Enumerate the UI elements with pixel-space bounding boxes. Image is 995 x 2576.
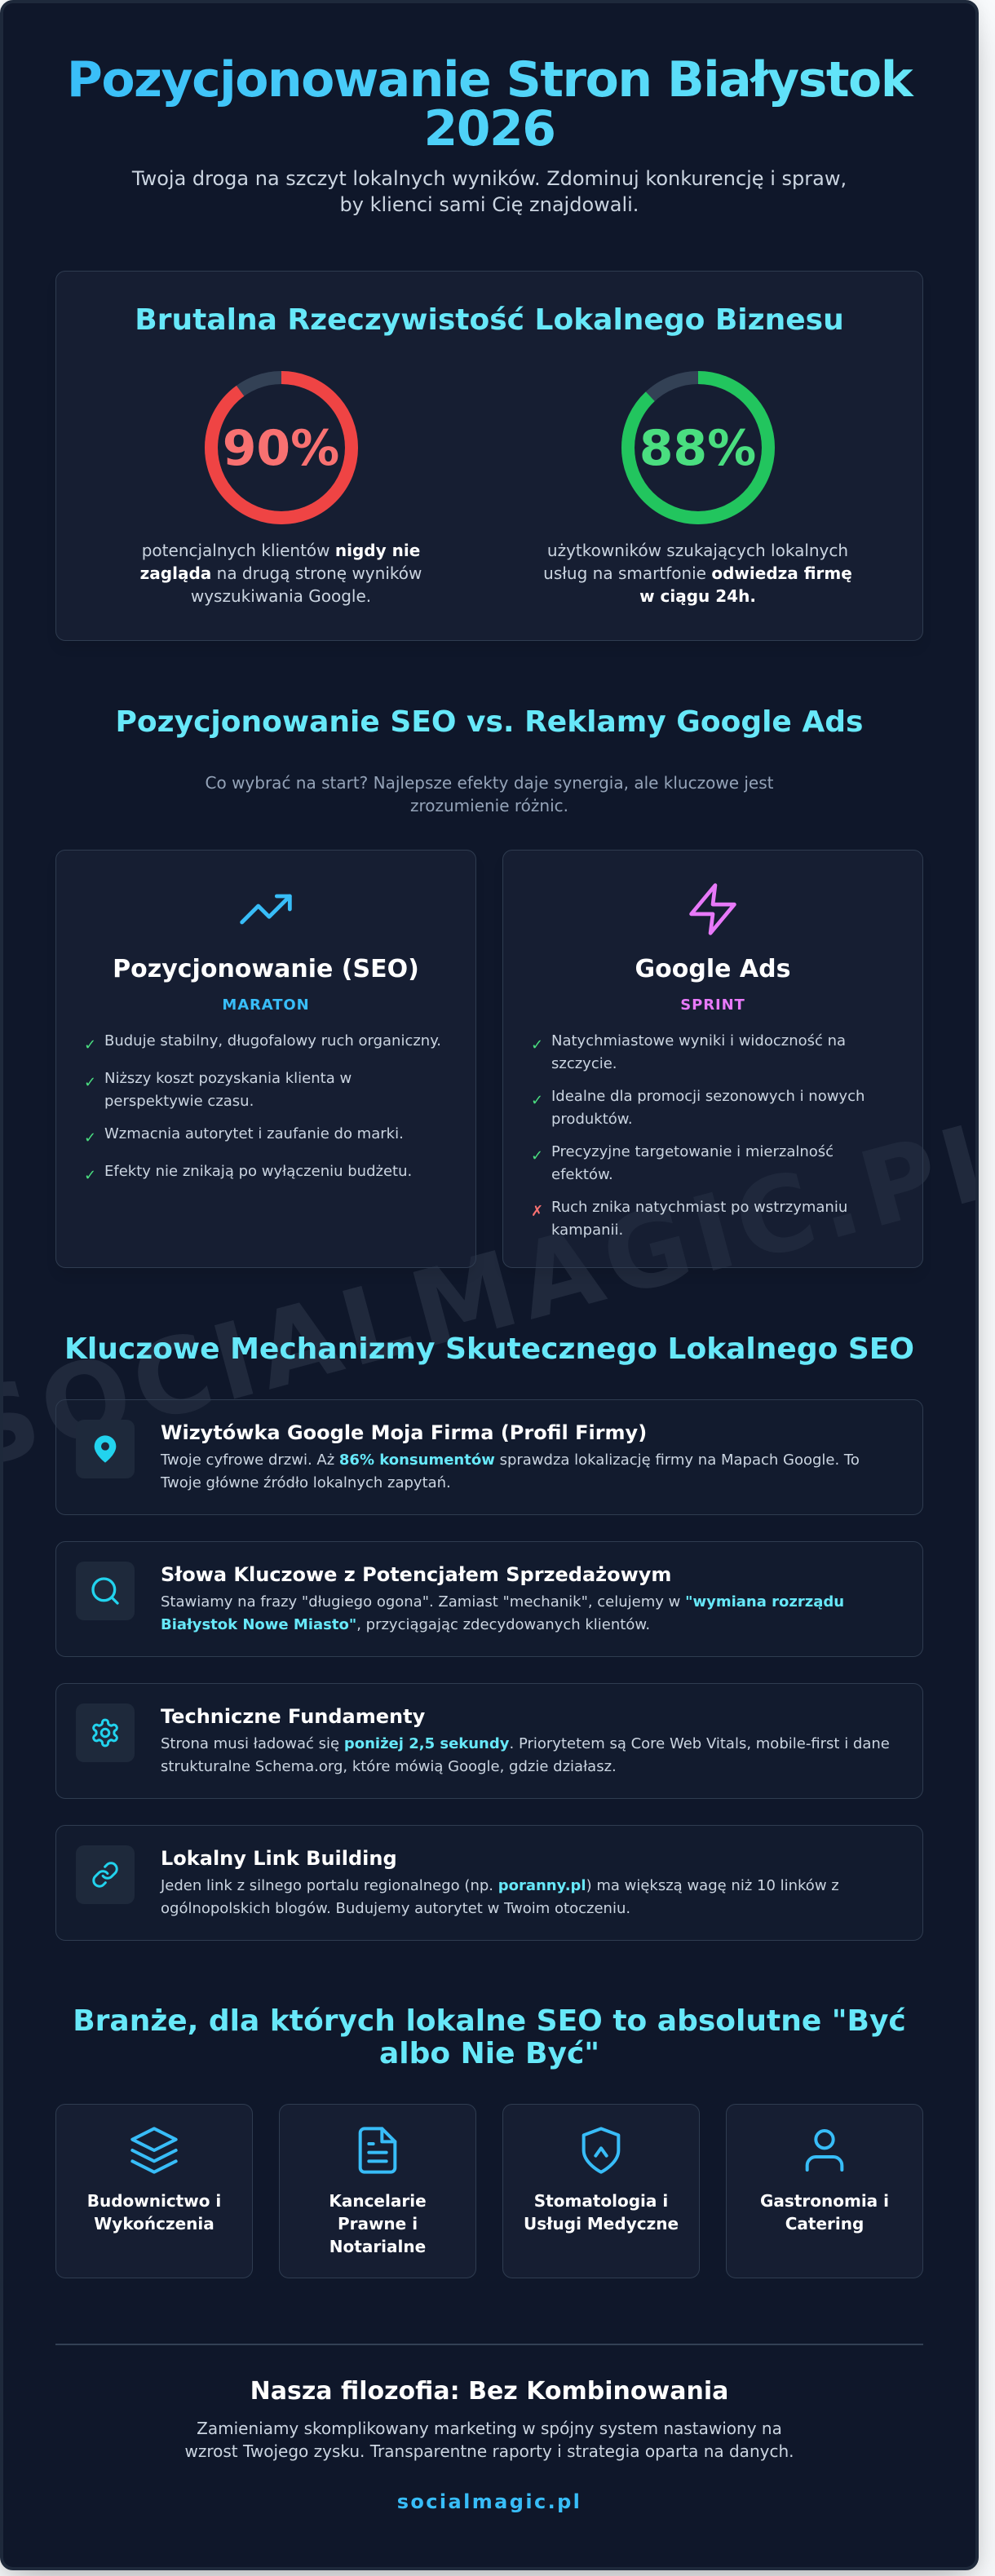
intro text: SEO vs Ads bbox=[206, 773, 773, 815]
icon: map pin bbox=[76, 1420, 135, 1478]
icon: trending up bbox=[240, 894, 292, 925]
industry label: Wykończenia bbox=[94, 2214, 214, 2234]
panel: brutal reality bbox=[55, 271, 923, 641]
donut chart: 88 percent bbox=[621, 371, 775, 524]
footer link: socialmagic.pl bbox=[397, 2490, 582, 2513]
card text bbox=[161, 1735, 890, 1775]
industry label bbox=[760, 2191, 889, 2234]
icon: magnifier bbox=[76, 1562, 135, 1620]
list item bbox=[531, 1032, 846, 1072]
stat caption: 90 percent bbox=[140, 541, 422, 606]
list item: Natychmiastowe wyniki i widoczność na bbox=[551, 1032, 846, 1049]
card text: Jeden link z silnego portalu regionalnego (np. poranny.pl) ma większą wagę niż 10 linków z bbox=[161, 1877, 839, 1894]
benefit list: SEO: ✓ bbox=[84, 1074, 96, 1091]
benefit list: Google Ads: ✓ bbox=[531, 1092, 543, 1109]
stat caption: 90 percent: potencjalnych klientów nigdy nie bbox=[142, 541, 420, 560]
industry label: Notarialne bbox=[329, 2237, 426, 2256]
donut chart: 90 percent bbox=[205, 371, 358, 524]
title bbox=[55, 55, 923, 153]
list item: szczycie. bbox=[551, 1055, 617, 1072]
subtitle: by klienci sami Cię znajdowali. bbox=[340, 193, 639, 216]
list item: Precyzyjne targetowanie i mierzalność bbox=[551, 1143, 834, 1160]
industry label bbox=[329, 2191, 427, 2256]
card text bbox=[160, 1451, 860, 1491]
heading: key mechanisms: Kluczowe Mechanizmy Skutecznego Lokalnego SEO bbox=[64, 1332, 914, 1366]
card text: ogólnopolskich blogów. Budujemy autorytet w Twoim otoczeniu. bbox=[161, 1900, 630, 1917]
title: Pozycjonowanie Stron Białystok bbox=[67, 51, 912, 108]
icon: person bbox=[806, 2129, 843, 2172]
panel title: Google Ads: Google Ads bbox=[635, 955, 790, 983]
mechanism card: Google profile bbox=[55, 1399, 923, 1515]
industry card: gastronomy bbox=[726, 2104, 923, 2278]
icon: document bbox=[359, 2127, 396, 2174]
card text: strukturalne Schema.org, które mówią Google, gdzie działasz. bbox=[161, 1758, 617, 1775]
industry label bbox=[524, 2191, 679, 2234]
stat caption: 88 percent: użytkowników szukających lokalnych bbox=[547, 541, 848, 560]
tag: maraton: MARATON bbox=[222, 996, 310, 1014]
panel: Google Ads bbox=[502, 850, 923, 1268]
list item: Niższy koszt pozyskania klienta w bbox=[104, 1070, 352, 1087]
heading: industries: Branże, dla których lokalne SEO to absolutne "Być bbox=[73, 2004, 906, 2038]
list item bbox=[531, 1199, 847, 1239]
industry label: Usługi Medyczne bbox=[524, 2214, 679, 2234]
icon: shield bbox=[582, 2127, 620, 2174]
card text: Strona musi ładować się poniżej 2,5 sekundy. Priorytetem są Core Web Vitals, mobile-first i dane bbox=[161, 1735, 890, 1752]
card title: Lokalny Link Building bbox=[161, 1847, 397, 1870]
card text: Twoje cyfrowe drzwi. Aż 86% konsumentów sprawdza lokalizację firmy na Mapach Google. To bbox=[161, 1451, 860, 1469]
title: 2026 bbox=[424, 100, 555, 157]
list item: perspektywie czasu. bbox=[104, 1093, 254, 1110]
card text bbox=[161, 1593, 844, 1633]
card text: Białystok Nowe Miasto", przyciągając zdecydowanych klientów. bbox=[161, 1616, 650, 1633]
heading: industries: albo Nie Być" bbox=[379, 2037, 599, 2070]
list item: Efekty nie znikają po wyłączeniu budżetu. bbox=[104, 1163, 412, 1180]
stat caption: 90 percent: zagląda na drugą stronę wyników bbox=[140, 563, 422, 583]
footer heading: Nasza filozofia: Bez Kombinowania bbox=[250, 2377, 728, 2406]
list item: Buduje stabilny, długofalowy ruch organiczny. bbox=[104, 1032, 441, 1049]
benefit list: SEO: ✓ bbox=[84, 1129, 96, 1147]
stat: 88 percent bbox=[543, 371, 852, 606]
heading: brutal reality: Brutalna Rzeczywistość Lokalnego Biznesu bbox=[135, 303, 844, 337]
list item bbox=[531, 1088, 865, 1128]
stat: 90 percent bbox=[140, 371, 422, 606]
industry label: Gastronomia i bbox=[760, 2191, 889, 2211]
list item: kampanii. bbox=[551, 1222, 623, 1239]
heading: industries bbox=[73, 2004, 906, 2070]
industry label bbox=[87, 2191, 221, 2234]
subtitle bbox=[132, 167, 847, 216]
list item: Ruch znika natychmiast po wstrzymaniu bbox=[551, 1199, 847, 1216]
card text: Twoje główne źródło lokalnych zapytań. bbox=[161, 1474, 451, 1491]
card title: Wizytówka Google Moja Firma (Profil Firmy) bbox=[161, 1421, 647, 1444]
stat caption: 88 percent: usług na smartfonie odwiedza firmę bbox=[543, 563, 852, 583]
list item: efektów. bbox=[551, 1166, 613, 1183]
list item: Wzmacnia autorytet i zaufanie do marki. bbox=[104, 1125, 404, 1142]
icon: gear bbox=[76, 1703, 135, 1762]
industry card: dental bbox=[502, 2104, 700, 2278]
heading: SEO vs Ads: Pozycjonowanie SEO vs. Reklamy Google Ads bbox=[116, 705, 863, 739]
industry label: Stomatologia i bbox=[534, 2191, 668, 2211]
mechanism card: technical bbox=[55, 1683, 923, 1799]
footer text: Zamieniamy skomplikowany marketing w spójny system nastawiony na bbox=[197, 2419, 782, 2438]
stat caption: 88 percent: w ciągu 24h. bbox=[639, 586, 756, 606]
intro text: SEO vs Ads: Co wybrać na start? Najlepsze efekty daje synergia, ale kluczowe jest bbox=[206, 773, 773, 793]
industry card: construction bbox=[55, 2104, 253, 2278]
benefit list: SEO: ✓ bbox=[84, 1036, 96, 1054]
mechanism card: link building bbox=[55, 1825, 923, 1941]
benefit list: SEO bbox=[84, 1032, 441, 1184]
industry label: Prawne i bbox=[338, 2214, 418, 2234]
stat number: 88%: 88% bbox=[639, 420, 756, 477]
list item bbox=[531, 1143, 834, 1183]
list item bbox=[84, 1070, 352, 1110]
icon: link bbox=[76, 1845, 135, 1904]
mechanism card: keywords bbox=[55, 1541, 923, 1657]
stat number: 90%: 90% bbox=[223, 420, 339, 477]
benefit list: Google Ads: ✗ bbox=[531, 1203, 543, 1220]
panel: SEO bbox=[55, 850, 476, 1268]
industry card: law bbox=[279, 2104, 476, 2278]
card text bbox=[160, 1877, 839, 1917]
industry label: Budownictwo i bbox=[87, 2191, 221, 2211]
industry label: Catering bbox=[785, 2214, 864, 2234]
list item: produktów. bbox=[551, 1111, 633, 1128]
footer text bbox=[184, 2419, 794, 2461]
benefit list: Google Ads: ✓ bbox=[531, 1147, 543, 1164]
stat caption: 90 percent: wyszukiwania Google. bbox=[191, 586, 371, 606]
subtitle: Twoja droga na szczyt lokalnych wyników. Zdominuj konkurencję i spraw, bbox=[132, 167, 847, 190]
icon: lightning bbox=[689, 883, 736, 935]
card text: Stawiamy na frazy "długiego ogona". Zamiast "mechanik", celujemy w "wymiana rozrządu bbox=[161, 1593, 844, 1611]
icon: layers bbox=[130, 2127, 178, 2174]
card title: Techniczne Fundamenty bbox=[161, 1705, 425, 1728]
list item: Idealne dla promocji sezonowych i nowych bbox=[551, 1088, 865, 1105]
panel title: SEO: Pozycjonowanie (SEO) bbox=[113, 955, 419, 983]
benefit list: SEO: ✓ bbox=[84, 1167, 96, 1184]
footer text: wzrost Twojego zysku. Transparentne raporty i strategia oparta na danych. bbox=[184, 2441, 794, 2461]
industry label: Kancelarie bbox=[329, 2191, 427, 2211]
card title: Słowa Kluczowe z Potencjałem Sprzedażowym bbox=[161, 1563, 671, 1586]
tag: sprint: SPRINT bbox=[680, 996, 745, 1014]
stat caption: 88 percent bbox=[543, 541, 852, 606]
benefit list: Google Ads bbox=[531, 1032, 865, 1239]
intro text: SEO vs Ads: zrozumienie różnic. bbox=[410, 796, 568, 815]
benefit list: Google Ads: ✓ bbox=[531, 1036, 543, 1054]
